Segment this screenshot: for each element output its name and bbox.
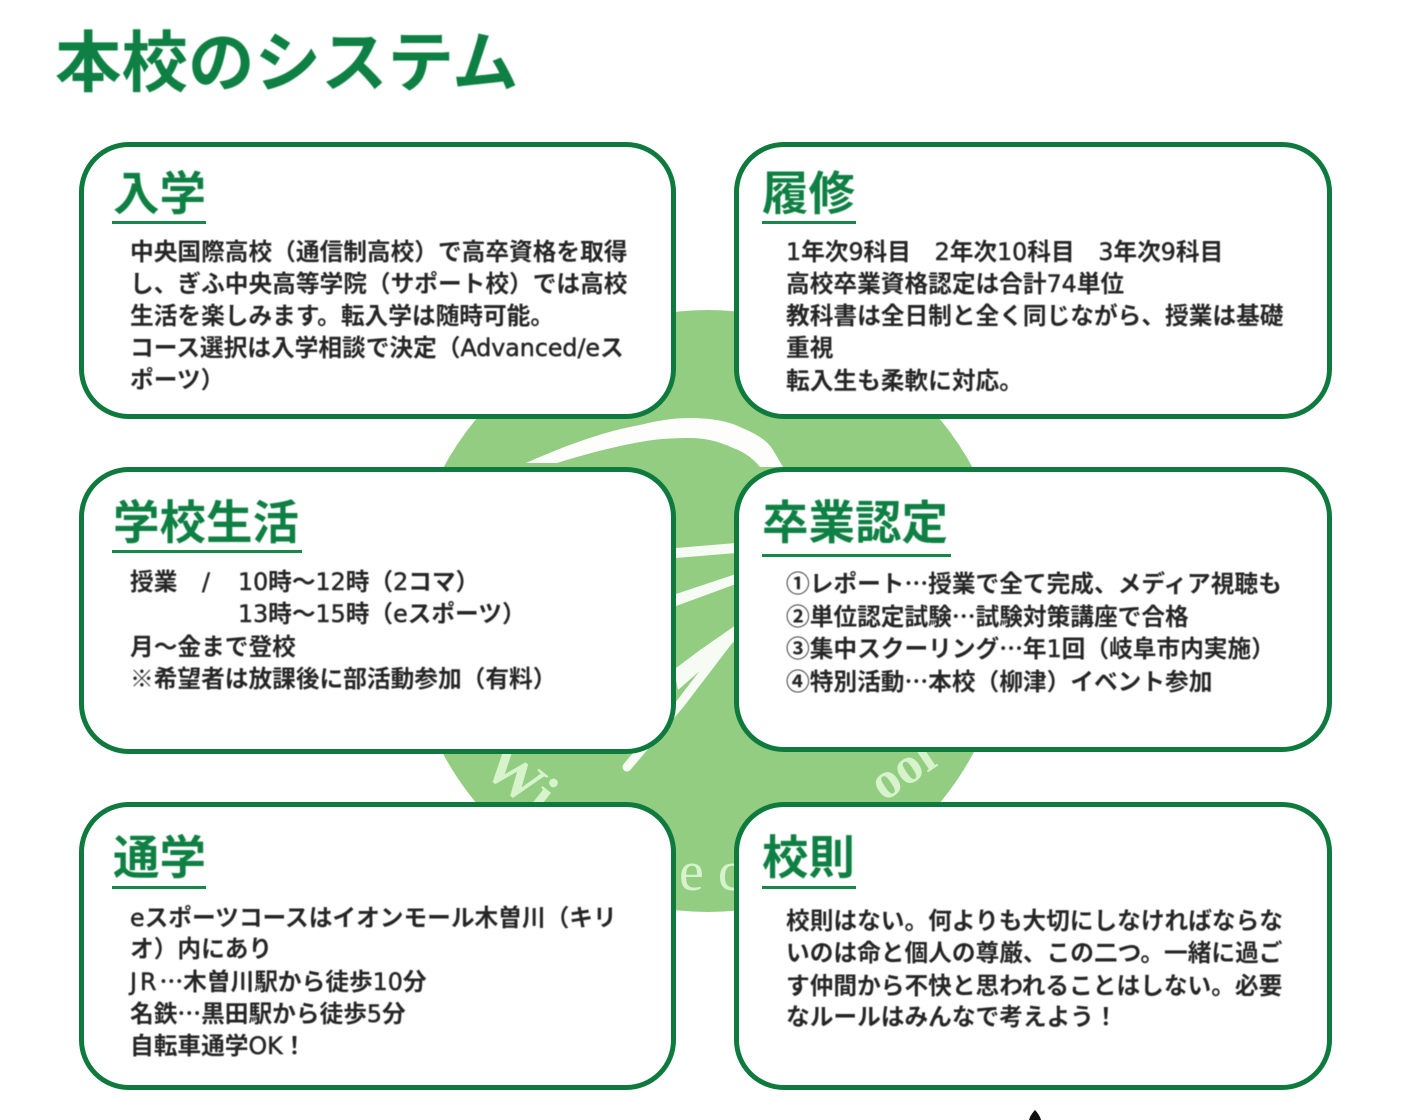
heading: 卒業認定: 卒業認定 <box>762 497 948 549</box>
heading: 通学: 通学 <box>113 832 206 884</box>
text: 通学: オ）内にあり <box>130 930 272 964</box>
text: 履修: 教科書は全日制と全く同じながら、授業は基礎 <box>786 297 1283 331</box>
text: 学校生活: 授業 <box>130 563 177 597</box>
text: 学校生活: 13時～15時（eスポーツ） <box>238 595 526 629</box>
panel: 校則 <box>734 802 1332 1090</box>
panel: 学校生活 <box>79 467 676 754</box>
text: 入学: 生活を楽しみます。転入学は随時可能。 <box>130 297 554 331</box>
text: 履修: 転入生も柔軟に対応。 <box>786 362 1023 396</box>
text: 履修: 1年次9科目 2年次10科目 3年次9科目 <box>786 233 1223 267</box>
text: 卒業認定: ①レポート…授業で全て完成、メディア視聴も <box>786 565 1282 599</box>
text: 入学: し、ぎふ中央高等学院（サポート校）では高校 <box>130 265 627 299</box>
background logo circle: e c <box>679 841 743 903</box>
panel: 入学 <box>79 142 676 419</box>
text: 通学: JR…木曽川駅から徒歩10分 <box>130 963 427 997</box>
text: 卒業認定 <box>786 565 1282 697</box>
text: 学校生活: 月～金まで登校 <box>130 628 296 662</box>
background logo circle: Wi <box>472 730 570 826</box>
panel: 履修 <box>734 142 1332 419</box>
text: 入学: ポーツ） <box>130 361 224 395</box>
text: 学校生活: / <box>202 568 210 596</box>
text: 学校生活: ※希望者は放課後に部活動参加（有料） <box>130 660 556 694</box>
text: 入学: コース選択は入学相談で決定（Advanced/eス <box>130 329 624 363</box>
heading: 入学: 入学 <box>113 168 206 220</box>
text: 卒業認定: ③集中スクーリング…年1回（岐阜市内実施） <box>786 630 1275 664</box>
heading: 校則: 校則 <box>762 832 855 884</box>
text: 卒業認定: ②単位認定試験…試験対策講座で合格 <box>786 598 1189 632</box>
text: 通学 <box>128 899 617 1061</box>
text: 校則: 校則はない。何よりも大切にしなければならな <box>786 902 1283 936</box>
text: 校則: なルールはみんなで考えよう！ <box>786 998 1118 1032</box>
text: 履修: 高校卒業資格認定は合計74単位 <box>786 265 1124 299</box>
text: 卒業認定: ④特別活動…本校（柳津）イベント参加 <box>786 663 1212 697</box>
text: 通学: eスポーツコースはイオンモール木曽川（キリ <box>130 899 617 933</box>
text: 入学 <box>130 233 628 395</box>
panel: 卒業認定 <box>734 467 1332 752</box>
text: 校則: す仲間から不快と思われることはしない。必要 <box>786 967 1282 1001</box>
text: 履修: 重視 <box>786 329 833 363</box>
text: 入学: 中央国際高校（通信制高校）で高卒資格を取得 <box>130 233 627 267</box>
heading: 履修: 履修 <box>762 168 855 220</box>
panel: 通学 <box>79 802 676 1090</box>
text: 通学: 自転車通学OK！ <box>130 1027 306 1061</box>
text: 通学: 名鉄…黒田駅から徒歩5分 <box>130 995 406 1029</box>
text: 校則 <box>786 902 1283 1032</box>
text: 学校生活 <box>130 563 556 694</box>
background logo circle: ool <box>859 728 946 812</box>
title: 本校のシステム <box>55 27 519 101</box>
text: 校則: いのは命と個人の尊厳、この二つ。一緒に過ご <box>786 934 1282 968</box>
text: 履修 <box>786 233 1284 396</box>
heading: 学校生活: 学校生活 <box>113 497 299 549</box>
text: 学校生活: 10時～12時（2コマ） <box>238 563 479 597</box>
